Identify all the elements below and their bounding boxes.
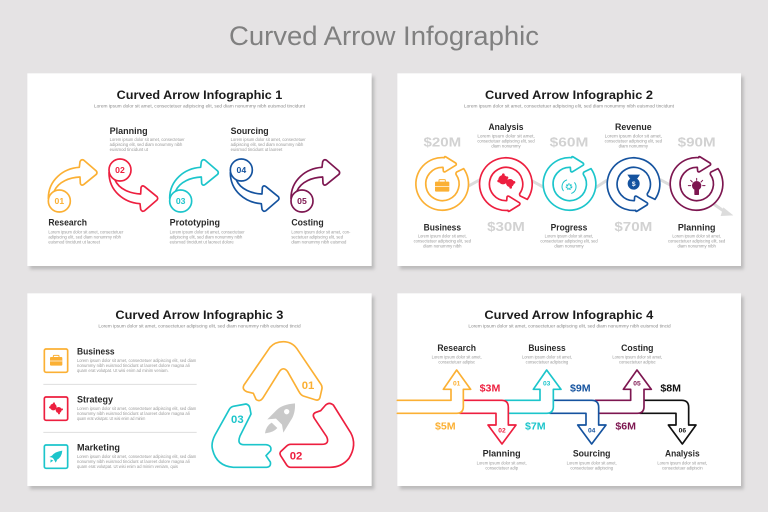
label: Revenue: Revenue <box>615 122 652 132</box>
arrow 04 blue <box>230 159 279 211</box>
arrow 01 orange <box>397 370 471 413</box>
label: Research <box>48 217 124 244</box>
label: Planning: Lorem ipsum dolor sit amet, <box>477 461 527 466</box>
label: Revenue: diam nonummy <box>619 144 649 149</box>
cycle arrow blue with money bag: $ <box>632 181 636 188</box>
label: Business: diam nonummy nibh <box>423 244 462 249</box>
cycle arrow purple with lightbulb <box>670 157 723 210</box>
label: Progress: diam nonummy <box>554 244 584 249</box>
label: Costing: sectetuer adipiscing elit, sed <box>291 234 344 239</box>
arrow 05 purple: 05 <box>633 381 641 388</box>
label: Sourcing: Lorem ipsum dolor sit amet, consectetuer <box>231 137 306 142</box>
text: Business: nonummy nibh euismod tincidunt ut laoreet dolore magna ali <box>77 363 190 368</box>
text: Strategy <box>77 394 197 421</box>
label: Business: Business <box>528 343 566 353</box>
value: $90M: $90M <box>678 135 716 150</box>
label: Progress: consectetuer adipiscing elit, sed <box>540 239 598 244</box>
label: Analysis: diam nonummy <box>491 144 521 149</box>
arrow 04 blue: 04 <box>588 428 596 435</box>
arrow 01 orange: 01 <box>55 196 64 206</box>
icon: rocket <box>265 403 295 433</box>
label: Costing: diam nonummy nibh euismod <box>291 239 347 244</box>
cycle arrow orange with briefcase <box>416 157 469 210</box>
label: Sourcing: consectetuer adipiscing <box>570 466 614 471</box>
triangle arrow 03 teal <box>212 404 271 467</box>
wave trend line <box>467 179 733 216</box>
value: $20M: $20M <box>423 135 461 150</box>
label: Planning <box>477 449 527 471</box>
label: Planning: euismod tincidunt ut <box>110 147 149 152</box>
value: $7M: $7M <box>525 422 546 433</box>
arrow 04 blue <box>550 400 606 444</box>
label: Business: consectetuer adipiscing <box>526 360 569 365</box>
text: Strategy: nonummy nibh euismod tincidunt ut laoreet dolore magna ali <box>77 411 190 416</box>
arrow 01 orange <box>48 160 97 212</box>
label: Research: Lorem ipsum dolor sit amet, consectetuer <box>48 229 124 234</box>
label: Revenue: consectetuer adipiscing elit, sed <box>605 139 663 144</box>
text: Strategy: Lorem ipsum dolor sit amet, consectetuer adipiscing elit, sed diam <box>77 406 197 411</box>
label: Sourcing: Sourcing <box>231 126 269 136</box>
label: Analysis <box>477 122 535 149</box>
label: Business: Lorem ipsum dolor sit amet, <box>522 355 572 360</box>
label: Planning <box>110 126 185 152</box>
label: Planning: diam nonummy nibh <box>677 244 716 249</box>
arrow 02 red: 02 <box>498 428 506 435</box>
label: Sourcing <box>567 449 617 471</box>
label: Research <box>432 343 482 365</box>
label: Sourcing: Lorem ipsum dolor sit amet, <box>567 461 617 466</box>
triangle arrow 01 orange: 01 <box>302 380 314 392</box>
label: Business: Lorem ipsum dolor sit amet, <box>418 234 467 239</box>
text: Marketing <box>77 442 197 469</box>
label: Revenue: Lorem ipsum dolor sit amet, <box>605 134 662 139</box>
arrow 03 teal: 03 <box>543 381 551 388</box>
arrow 05 purple <box>291 160 340 212</box>
arrow 01 orange: 01 <box>453 381 461 388</box>
label: Costing: Costing <box>291 217 324 227</box>
label: Research: Research <box>48 217 87 227</box>
label: Planning: Planning <box>483 449 521 459</box>
text: Marketing: Marketing <box>77 442 120 452</box>
subtitle 1: Lorem ipsum dolor sit amet, consectetuer adipiscing elit, sed diam nonummy nibh euismod tincidunt <box>94 104 306 109</box>
text: Marketing: Lorem ipsum dolor sit amet, consectetuer adipiscing elit, sed diam <box>77 454 197 459</box>
text: Business <box>77 346 197 373</box>
triangle arrow 02 red: 02 <box>290 451 302 463</box>
label: Analysis: consectetuer adipiscin <box>662 466 703 471</box>
text: Business: Business <box>77 346 115 356</box>
heading 1: Curved Arrow Infographic 1 <box>117 88 283 102</box>
value: $9M: $9M <box>570 384 591 395</box>
label: Sourcing <box>231 126 306 152</box>
label: Planning: Lorem ipsum dolor sit amet, consectetuer <box>110 137 185 142</box>
value: $30M: $30M <box>487 219 525 234</box>
arrow 02 red <box>460 400 516 444</box>
label: Progress: Progress <box>551 222 587 232</box>
label: Business: Business <box>424 222 461 232</box>
label: Business: consectetuer adipiscing elit, sed <box>414 239 472 244</box>
main title: Curved Arrow Infographic <box>229 21 539 51</box>
label: Research: Lorem ipsum dolor sit amet, <box>432 355 482 360</box>
subtitle 4: Lorem ipsum dolor sit amet, consectetuer adipiscing elit, sed diam nonummy nibh euismod tincid <box>468 324 671 329</box>
text: Business: quam erat volutpat. Ut wisi enim ad minim veniam. <box>77 368 169 373</box>
cycle arrow teal with gear <box>543 157 596 210</box>
arrow 05 purple: 05 <box>297 196 307 206</box>
label: Planning: consectetuer adip <box>485 466 519 471</box>
arrow 06 black <box>640 400 696 444</box>
label: Costing <box>291 217 351 244</box>
label: Costing <box>612 343 662 365</box>
arrow 03 teal <box>505 370 561 413</box>
label: Analysis: consectetuer adipiscing elit, sed <box>477 139 535 144</box>
label: Analysis <box>657 449 707 471</box>
label: Research: adipiscing elit, sed diam nonummy nibh <box>48 234 122 239</box>
heading 2: Curved Arrow Infographic 2 <box>485 88 653 102</box>
text: Marketing: nonummy nibh euismod tincidunt ut laoreet dolore magna ali <box>77 459 190 464</box>
icon box: puzzle <box>44 397 68 420</box>
text: Business: Lorem ipsum dolor sit amet, consectetuer adipiscing elit, sed diam <box>77 358 197 363</box>
label: Prototyping: euismod tincidunt ut laoreet dolore <box>170 239 234 244</box>
label: Costing: Lorem ipsum dolor sit amet, con- <box>291 229 351 234</box>
label: Sourcing: euismod tincidunt ut laoreet <box>231 147 283 152</box>
label: Prototyping: adipiscing elit, sed diam nonummy nibh <box>170 234 243 239</box>
arrow 03 teal <box>170 160 218 212</box>
label: Revenue <box>605 122 663 149</box>
text: Strategy: Strategy <box>77 394 113 404</box>
label: Prototyping: Prototyping <box>170 217 220 227</box>
arrow 06 black: 06 <box>679 428 686 435</box>
value: $6M: $6M <box>615 422 636 433</box>
arrow 04 blue: 04 <box>237 165 246 175</box>
value: $70M: $70M <box>614 219 652 234</box>
panel: curved arrow infographic 1 <box>27 73 374 269</box>
label: Planning: adipiscing elit, sed diam nonummy nibh <box>110 142 183 147</box>
value: $8M: $8M <box>660 384 681 395</box>
label: Analysis: Analysis <box>665 449 700 459</box>
label: Costing: consectetuer adipisc <box>619 360 656 365</box>
label: Analysis: Lorem ipsum dolor sit amet, <box>657 461 707 466</box>
panel: curved arrow infographic 4 <box>397 293 744 489</box>
arrow 02 red <box>109 159 158 211</box>
heading 4: Curved Arrow Infographic 4 <box>484 308 654 322</box>
label: Analysis: Lorem ipsum dolor sit amet, <box>477 134 535 139</box>
label: Analysis: Analysis <box>488 122 523 132</box>
label: Sourcing: Sourcing <box>573 449 610 459</box>
label: Research: consectetuer adipisc <box>438 360 476 365</box>
panel: curved arrow infographic 3 <box>27 293 374 489</box>
triangle arrow 02 red <box>280 403 354 467</box>
heading 3: Curved Arrow Infographic 3 <box>115 308 284 322</box>
label: Business <box>522 343 572 365</box>
panel: curved arrow infographic 2 <box>397 73 744 269</box>
cycle arrow blue with money bag <box>607 158 660 211</box>
text: Strategy: quam erat volutpat. Ut wisi enim ad minim <box>77 416 146 421</box>
icon box: briefcase <box>44 349 68 372</box>
value: $5M: $5M <box>435 422 456 433</box>
label: Sourcing: adipiscing elit, sed diam nonummy nibh <box>231 142 304 147</box>
label: Progress <box>540 222 598 249</box>
label: Planning: Planning <box>110 126 148 136</box>
label: Research: Research <box>437 343 476 353</box>
label: Planning: consectetuer adipiscing elit, sed <box>668 239 726 244</box>
value: $3M: $3M <box>480 384 500 395</box>
cycle arrow red with puzzle <box>480 158 532 211</box>
arrow 05 purple <box>595 370 651 413</box>
icon box: rocket <box>44 445 68 468</box>
label: Prototyping <box>170 217 245 244</box>
label: Planning <box>668 222 726 249</box>
text: Marketing: quam erat volutpat. Ut wisi enim ad minim veniam, quis <box>77 464 178 469</box>
value: $60M: $60M <box>550 135 588 150</box>
label: Planning: Lorem ipsum dolor sit amet, <box>672 234 721 239</box>
label: Costing: Lorem ipsum dolor sit amet, <box>612 355 662 360</box>
label: Prototyping: Lorem ipsum dolor sit amet, consectetuer <box>170 229 245 234</box>
label: Research: euismod tincidunt ut laoreet <box>48 239 101 244</box>
label: Business <box>414 222 472 249</box>
arrow 03 teal: 03 <box>176 196 186 206</box>
arrow 02 red: 02 <box>115 165 125 175</box>
triangle arrow 01 orange <box>243 342 322 401</box>
label: Costing: Costing <box>621 343 653 353</box>
label: Planning: Planning <box>678 222 715 232</box>
label: Progress: Lorem ipsum dolor sit amet, <box>545 234 593 239</box>
triangle arrow 03 teal: 03 <box>231 414 244 426</box>
subtitle 3: Lorem ipsum dolor sit amet, consectetuer adipiscing elit, sed diam nonummy nibh euismod tincid <box>98 324 301 329</box>
subtitle 2: Lorem ipsum dolor sit amet, consectetuer adipiscing elit, sed diam nonummy nibh euismod tincidunt <box>464 104 675 109</box>
